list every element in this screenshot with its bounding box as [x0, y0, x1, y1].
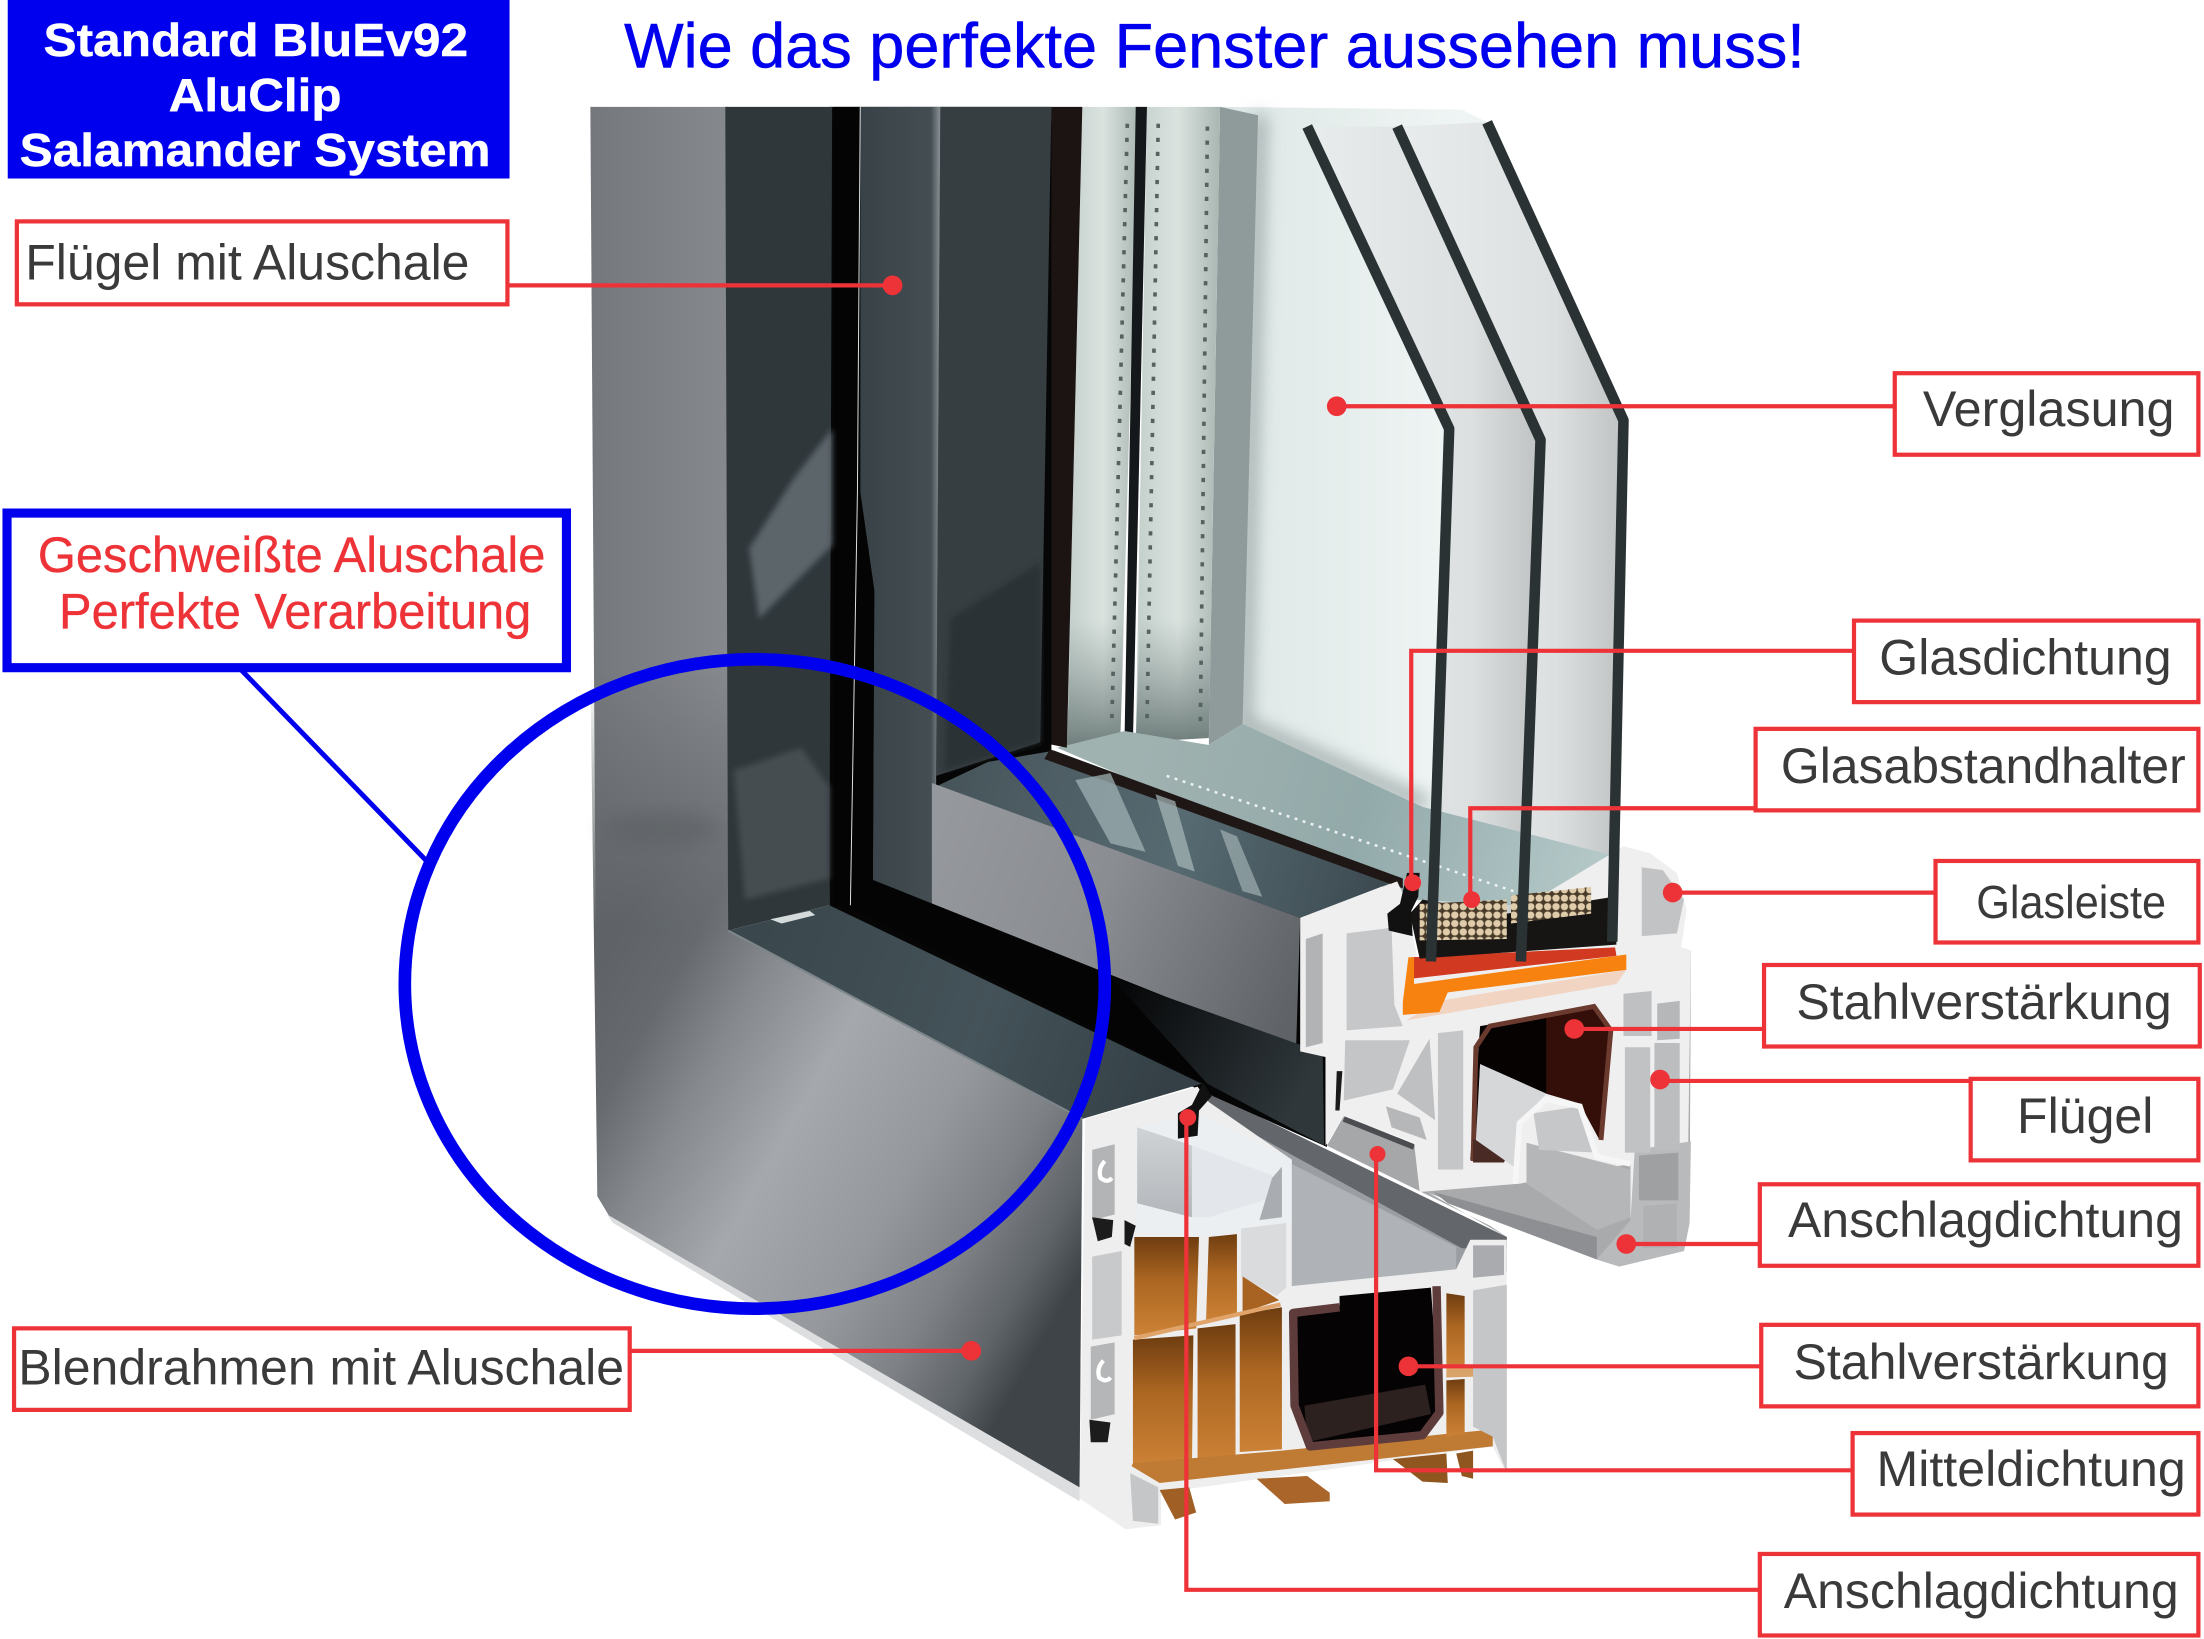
sash dark chamfer, vertical	[936, 107, 1051, 776]
outer frame	[590, 107, 1202, 1501]
callout text	[38, 527, 545, 639]
sash	[860, 107, 1403, 1051]
glass silhouette	[1220, 107, 1623, 933]
right chambers	[1623, 991, 1652, 1036]
header text: Standard BluEv92	[44, 14, 468, 66]
frame chamfer, horizontal	[728, 905, 1202, 1119]
label: Mitteldichtung	[1369, 1146, 2198, 1515]
label: Flügel mit Aluschale	[17, 221, 902, 304]
dark seal strip	[1040, 107, 1082, 748]
header text: AluClip	[169, 69, 342, 121]
lower grey sash body	[1420, 950, 1691, 1266]
label: Flügel	[1650, 1070, 2198, 1160]
glass bead chamber	[1642, 867, 1684, 936]
chamfer reflections	[749, 429, 832, 618]
label: Stahlverstärkung (Flügel)	[1564, 965, 2200, 1047]
glazing panel	[1040, 107, 1623, 933]
dark backing behind sash and reveal	[829, 107, 1327, 1147]
alu clip chambers	[1092, 1144, 1115, 1220]
sash horizontal chamfer	[938, 751, 1403, 918]
black butyl base	[1410, 897, 1616, 959]
grey interior through steel	[1476, 1064, 1546, 1167]
frame section silhouette	[1080, 1087, 1507, 1529]
steel reinforcement	[1290, 1288, 1439, 1448]
orange glazing bridge	[1403, 954, 1626, 1015]
upper chambers	[1347, 928, 1403, 1030]
grey floor	[1292, 1164, 1456, 1286]
window photo: corner section	[590, 107, 1691, 1529]
dark groove on frame band	[1206, 1091, 1507, 1248]
upper right small chamber	[1473, 1245, 1504, 1278]
underside light strip	[607, 1214, 1080, 1501]
lower-left small chamber	[1130, 1473, 1158, 1524]
sash face, horizontal	[932, 783, 1300, 1051]
label: Anschlagdichtung (Flügel)	[1616, 1184, 2198, 1266]
spacer divider	[1124, 107, 1147, 742]
sash section profile	[1300, 846, 1691, 1266]
white hairline	[850, 107, 860, 905]
frame rear band behind sash	[1200, 1089, 1507, 1272]
right orange chambers	[1446, 1293, 1465, 1369]
chamfer reflections	[1075, 773, 1146, 852]
alu clip chamber	[1306, 933, 1323, 1047]
label: Glasdichtung	[1404, 621, 2198, 891]
steel reinforcement	[1470, 1006, 1609, 1160]
label: Flügel mit Aluschale: Flügel mit Aluschale	[25, 235, 469, 291]
label: Verglasung: Verglasung	[1923, 381, 2174, 437]
frame section profile	[1080, 1082, 1507, 1529]
desiccant beads	[1420, 900, 1507, 940]
label: Glasabstandhalter	[1463, 729, 2198, 908]
sash face, vertical	[860, 107, 940, 904]
soft shadow at glass edge	[1244, 115, 1427, 804]
top chamber	[1137, 1113, 1292, 1237]
label: Mitteldichtung: Mitteldichtung	[1876, 1441, 2186, 1497]
frame chamfer, vertical	[725, 107, 832, 931]
label: Glasleiste	[1663, 861, 2198, 942]
label: Blendrahmen mit Aluschale: Blendrahmen mit Aluschale	[18, 1340, 624, 1396]
spacer bars	[1067, 107, 1139, 748]
label: Anschlagdichtung (Blendrahmen)	[1179, 1109, 2198, 1635]
label: Anschlagdichtung (Flügel): Anschlagdichtung	[1788, 1192, 2183, 1248]
label: Glasleiste: Glasleiste	[1976, 876, 2166, 928]
header box	[8, 0, 510, 179]
inter-pane gaps	[1307, 127, 1541, 928]
light chamber	[1241, 1223, 1286, 1296]
label: Glasdichtung: Glasdichtung	[1879, 630, 2172, 686]
label: Stahlverstärkung (Flügel): Stahlverstärkung	[1796, 974, 2172, 1030]
callout text: Geschweißte Aluschale	[38, 527, 545, 583]
orange chambers	[1134, 1237, 1199, 1335]
header text: Salamander System	[20, 124, 491, 176]
black gasket	[1178, 1082, 1212, 1139]
orange base and feet	[1132, 1430, 1493, 1483]
spacer perforations	[1112, 124, 1207, 721]
grey bottom chambers backing	[1597, 1141, 1691, 1266]
callout: welded aluminium shell	[7, 513, 566, 860]
triple glass panes	[1307, 122, 1623, 961]
right grey column	[1473, 1285, 1507, 1473]
spacer lower shading	[1067, 618, 1124, 748]
pale wedge under bridge	[1406, 970, 1626, 1021]
label: Verglasung	[1327, 373, 2198, 455]
label: Flügel: Flügel	[2017, 1088, 2153, 1144]
sash lower dark face	[1110, 977, 1324, 1146]
label: Glasabstandhalter: Glasabstandhalter	[1781, 738, 2186, 794]
clip hooks	[1098, 1161, 1112, 1380]
callout text: Perfekte Verarbeitung	[59, 583, 531, 639]
frame face, lower	[590, 675, 1082, 1490]
black seal on stem	[1335, 1071, 1342, 1110]
red glazing block	[1411, 947, 1616, 978]
label: Stahlverstärkung (Blendrahmen): Stahlverstärkung	[1794, 1334, 2169, 1390]
lower floor	[1526, 1143, 1631, 1230]
grey glass edge	[1209, 107, 1258, 745]
black reveal between frame and sash	[834, 107, 1325, 1085]
clip black seals	[1092, 1217, 1113, 1241]
black glazing gasket	[1387, 873, 1420, 936]
orange rib pale lines	[1134, 1304, 1281, 1338]
sash floor	[1327, 1116, 1507, 1237]
bottom spacer strip	[1057, 724, 1621, 911]
label: Anschlagdichtung (Blendrahmen): Anschlagdichtung	[1784, 1563, 2179, 1619]
sash section silhouette	[1300, 846, 1691, 1220]
label: Blendrahmen mit Aluschale	[14, 1328, 981, 1410]
title: Wie das perfekte Fenster aussehen muss!	[624, 11, 1805, 81]
lower chamber	[1386, 1106, 1427, 1140]
white stays inside steel	[1515, 1099, 1631, 1184]
frame face, upper	[590, 107, 1082, 1490]
smudges on frame face	[602, 812, 720, 846]
blue highlight circle	[405, 659, 1105, 1309]
label: Stahlverstärkung (Blendrahmen)	[1399, 1325, 2198, 1406]
header text	[20, 14, 491, 176]
